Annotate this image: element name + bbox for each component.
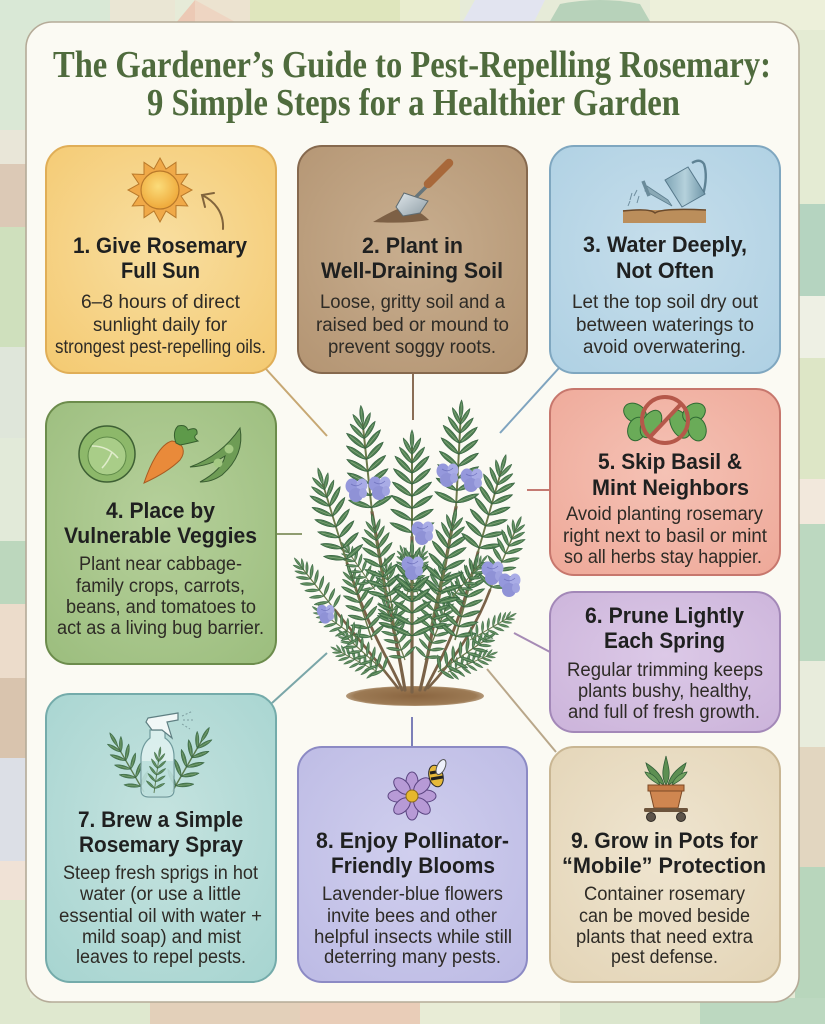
body 7: leaves to repel pests. <box>76 947 246 968</box>
heading 7 <box>78 807 243 857</box>
body 4: act as a living bug barrier. <box>57 618 264 639</box>
icon: curved arrow <box>202 193 223 229</box>
body 4: beans, and tomatoes to <box>66 597 256 618</box>
body 5 <box>563 504 768 568</box>
icon: cabbage <box>79 426 135 482</box>
body 7: essential oil with water + <box>59 906 262 927</box>
heading 3: 3. Water Deeply, <box>583 232 747 257</box>
rosemary plant <box>283 399 537 706</box>
card 4: veggies <box>46 402 276 664</box>
heading 1 <box>73 233 247 283</box>
heading 8 <box>316 828 509 878</box>
body 1 <box>55 292 266 358</box>
heading 2 <box>321 233 503 283</box>
body 9: Container rosemary <box>584 884 745 905</box>
body 8: helpful insects while still <box>314 927 512 948</box>
connector lines to plant <box>266 368 559 752</box>
body 9: plants that need extra <box>576 927 753 948</box>
heading 6: 6. Prune Lightly <box>585 603 744 628</box>
card 1: full sun <box>46 146 276 373</box>
body 4: Plant near cabbage- <box>79 554 242 575</box>
card 3: water <box>550 146 780 373</box>
heading 6: Each Spring <box>604 628 725 653</box>
icon: potted plant on cart <box>644 756 688 822</box>
card 8: pollinators <box>298 747 527 982</box>
heading 5: 5. Skip Basil & <box>598 449 742 474</box>
body 1: strongest pest-repelling oils. <box>55 337 266 358</box>
body 2: prevent soggy roots. <box>328 337 496 358</box>
body 4: family crops, carrots, <box>76 576 245 597</box>
body 8: deterring many pests. <box>324 947 501 968</box>
heading 7: 7. Brew a Simple <box>78 807 243 832</box>
body 1: sunlight daily for <box>93 315 228 336</box>
body 3: Let the top soil dry out <box>572 292 759 313</box>
body 3: avoid overwatering. <box>583 337 746 358</box>
icon: spray bottle with sprigs <box>97 711 223 800</box>
card 9: pots <box>550 747 780 982</box>
body 8: Lavender-blue flowers <box>322 884 503 905</box>
body 7: Steep fresh sprigs in hot <box>63 863 259 884</box>
title <box>53 44 771 124</box>
body 2: Loose, gritty soil and a <box>320 292 505 313</box>
body 3 <box>572 292 759 358</box>
heading 3 <box>583 232 747 283</box>
body 9 <box>576 884 753 968</box>
icon: herbs with prohibition sign <box>620 397 709 443</box>
heading 8: Friendly Blooms <box>331 853 495 878</box>
body 6: and full of fresh growth. <box>568 702 760 723</box>
body 5: Avoid planting rosemary <box>566 504 763 525</box>
body 8: invite bees and other <box>327 906 498 927</box>
body 7: water (or use a little <box>79 884 241 905</box>
card 2: soil <box>298 146 527 373</box>
heading 4: 4. Place by <box>106 498 215 523</box>
heading 6 <box>585 603 744 653</box>
icon: watering can over soil <box>623 161 706 223</box>
heading 9: “Mobile” Protection <box>562 853 766 878</box>
heading 1: 1. Give Rosemary <box>73 233 247 258</box>
heading 4: Vulnerable Veggies <box>64 523 257 548</box>
body 7 <box>59 863 262 968</box>
icon: bean pod <box>190 428 241 482</box>
heading 4 <box>64 498 257 548</box>
heading 3: Not Often <box>616 258 714 283</box>
heading 5: Mint Neighbors <box>592 475 749 500</box>
body 2: raised bed or mound to <box>316 315 509 336</box>
icon: trowel in soil <box>373 163 449 223</box>
heading 2: 2. Plant in <box>362 233 463 258</box>
soil mound <box>346 686 484 706</box>
body 1: 6–8 hours of direct <box>81 292 241 313</box>
heading 1: Full Sun <box>121 258 200 283</box>
heading 9: 9. Grow in Pots for <box>571 828 758 853</box>
body 6: plants bushy, healthy, <box>578 681 752 702</box>
body 5: right next to basil or mint <box>563 526 768 547</box>
body 2 <box>316 292 509 358</box>
body 6: Regular trimming keeps <box>567 660 763 681</box>
heading 9 <box>562 828 766 878</box>
icon: carrot <box>144 426 198 483</box>
body 7: mild soap) and mist <box>82 927 242 948</box>
icon: sun <box>128 158 192 222</box>
body 8 <box>314 884 512 968</box>
card 6: prune <box>550 592 780 732</box>
card 5: neighbors <box>550 389 780 575</box>
body 4 <box>57 554 264 639</box>
body 9: can be moved beside <box>579 906 750 927</box>
flowers <box>317 464 520 624</box>
card 7: spray <box>46 694 276 982</box>
heading 5 <box>592 449 749 500</box>
heading 7: Rosemary Spray <box>79 832 243 857</box>
body 6 <box>567 660 763 723</box>
body 3: between waterings to <box>576 315 754 336</box>
title: 9 Simple Steps for a Healthier Garden <box>147 82 680 124</box>
body 9: pest defense. <box>611 947 718 968</box>
icon: flower and bee <box>388 758 448 820</box>
heading 8: 8. Enjoy Pollinator- <box>316 828 509 853</box>
body 5: so all herbs stay happier. <box>564 547 762 568</box>
heading 2: Well-Draining Soil <box>321 258 503 283</box>
